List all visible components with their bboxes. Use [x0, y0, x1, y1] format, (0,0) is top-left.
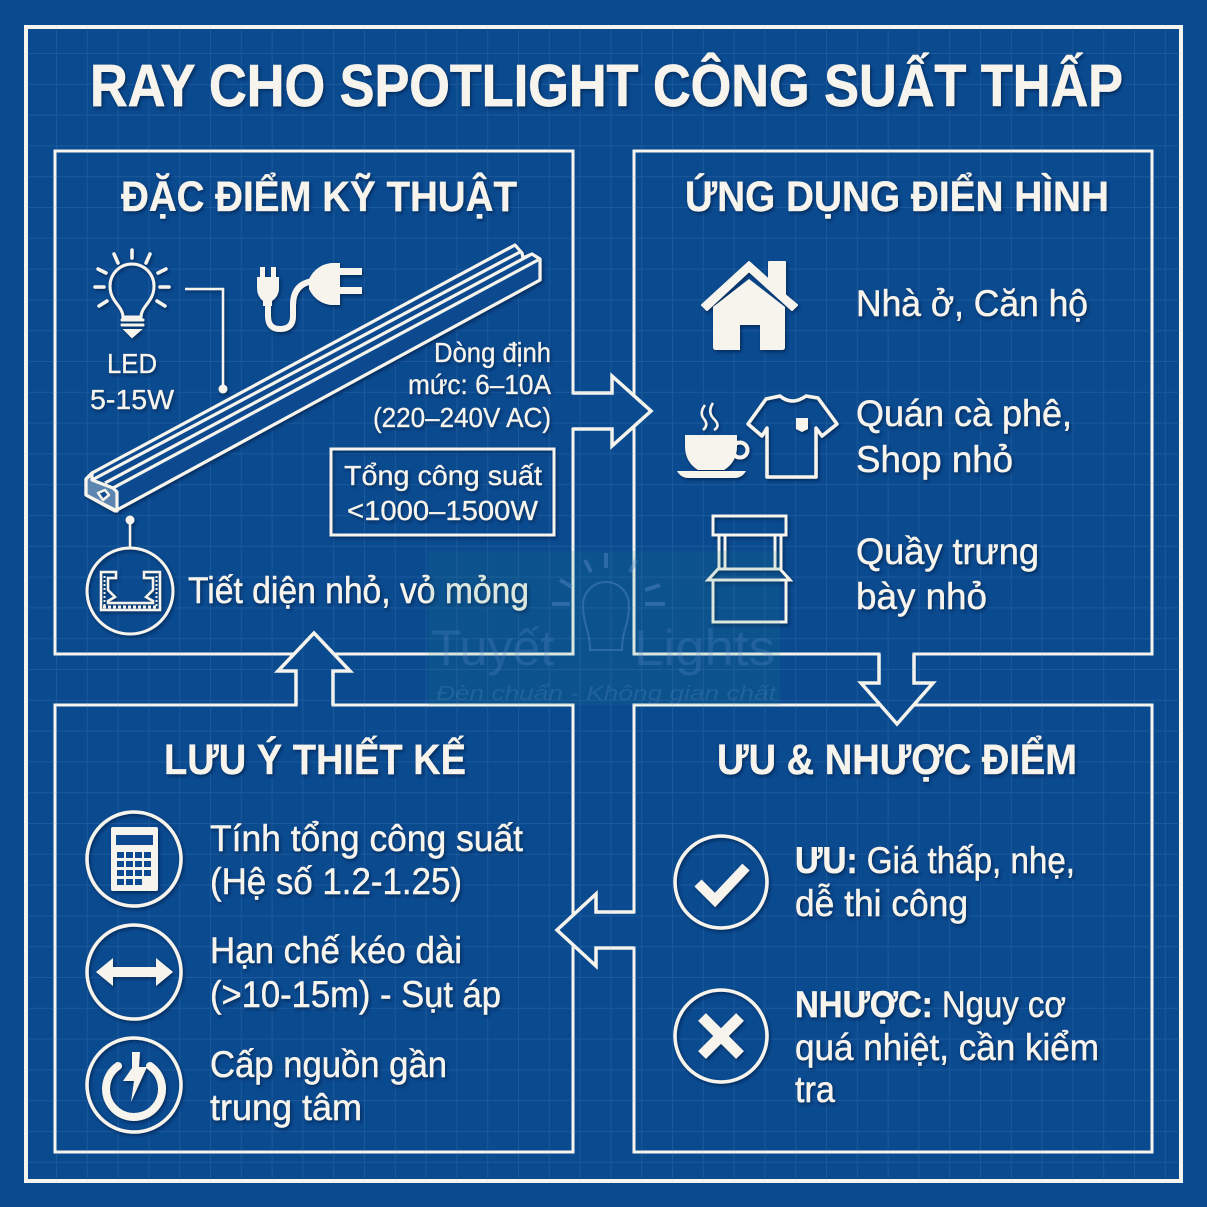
icon: check: [675, 836, 767, 928]
watermark: tuyết lights: Lights: [634, 620, 775, 676]
icon: calculator: [87, 812, 181, 906]
text: total power: Tính tổng công suất: [210, 818, 524, 859]
text: limit length: Hạn chế kéo dài: [210, 930, 462, 971]
illustration: ultra-thin track rail: [86, 245, 540, 511]
heading: ưu và nhược điểm: ƯU & NHƯỢC ĐIỂM: [717, 735, 1077, 784]
icon: rail cross-section: [87, 548, 173, 634]
callout: total power box: [331, 449, 554, 535]
text: small counter: bày nhỏ: [856, 576, 987, 617]
text: small counter: Quầy trưng: [856, 531, 1039, 572]
text: limit length: [210, 930, 501, 1015]
connector: rail to section: [126, 516, 134, 548]
panel: ưu nhược điểm frame: [634, 705, 1152, 1152]
arrow: left: [557, 894, 637, 966]
callout: total power box: <1000–1500W: [347, 495, 539, 526]
text: disadvantages: NHƯỢC: Nguy cơ: [795, 984, 1066, 1025]
text: café and shop: Shop nhỏ: [856, 439, 1013, 480]
heading: lưu ý thiết kế: LƯU Ý THIẾT KẾ: [164, 736, 466, 784]
panel: technical specs content: [86, 172, 554, 634]
watermark: tuyết lights: Đèn chuẩn - Không gian chất: [436, 683, 778, 705]
panel: đặc điểm kỹ thuật frame: [55, 151, 573, 654]
icon: cross: [675, 990, 767, 1082]
text: rated current: [373, 337, 551, 433]
text: disadvantages: quá nhiệt, cần kiểm: [795, 1027, 1099, 1068]
text: advantages: [795, 840, 1075, 924]
arrow: down: [861, 651, 933, 724]
text: cross-section note: Tiết diện nhỏ, vỏ mỏng: [188, 570, 529, 611]
icon: power plug and cord: [257, 263, 362, 329]
text: rated current: Dòng định: [434, 337, 551, 368]
text: feed near center: Cấp nguồn gần: [210, 1044, 447, 1085]
callout: total power box: Tổng công suất: [344, 460, 542, 491]
icon: display kiosk: [708, 516, 790, 622]
text: led wattage: [90, 348, 175, 415]
text: total power: (Hệ số 1.2-1.25): [210, 861, 462, 902]
text: feed near center: [210, 1044, 447, 1128]
heading: đặc điểm kỹ thuật: ĐẶC ĐIỂM KỸ THUẬT: [121, 172, 517, 221]
text: led wattage: 5-15W: [90, 384, 175, 415]
text: rated current: mức: 6–10A: [408, 369, 551, 400]
icon: led bulb: [95, 250, 169, 337]
text: small counter: [856, 531, 1039, 617]
panel: pros and cons content: [675, 735, 1099, 1110]
text: feed near center: trung tâm: [210, 1087, 362, 1128]
icon: coffee cup: [677, 403, 748, 478]
text: café and shop: [856, 393, 1072, 480]
icon: double arrow: [87, 925, 181, 1019]
text: total power: [210, 818, 524, 902]
arrow: right: [570, 376, 652, 447]
connector: led to rail: [185, 289, 228, 394]
text: limit length: (>10-15m) - Sụt áp: [210, 974, 501, 1015]
text: café and shop: Quán cà phê,: [856, 393, 1072, 434]
icon: house: [702, 262, 797, 350]
text: led wattage: LED: [107, 348, 157, 379]
panel: design notes content: [87, 736, 524, 1132]
arrow: up: [278, 633, 350, 708]
icon: power with bolt: [87, 1038, 181, 1132]
watermark: tuyết lights: [428, 551, 780, 705]
text: rated current: (220–240V AC): [373, 402, 551, 433]
panel: lưu ý thiết kế frame: [55, 705, 573, 1152]
text: nhà ở: Nhà ở, Căn hộ: [856, 283, 1088, 324]
text: disadvantages: [795, 984, 1099, 1110]
text: advantages: dễ thi công: [795, 883, 968, 924]
panel: typical applications content: [677, 172, 1109, 622]
panel: ứng dụng điển hình frame: [634, 151, 1152, 654]
text: advantages: ƯU: Giá thấp, nhẹ,: [795, 840, 1075, 881]
heading: ứng dụng điển hình: ỨNG DỤNG ĐIỂN HÌNH: [685, 172, 1109, 221]
text: disadvantages: tra: [795, 1069, 835, 1110]
watermark: tuyết lights: Tuyết: [431, 620, 554, 676]
icon: t-shirt: [748, 396, 837, 477]
